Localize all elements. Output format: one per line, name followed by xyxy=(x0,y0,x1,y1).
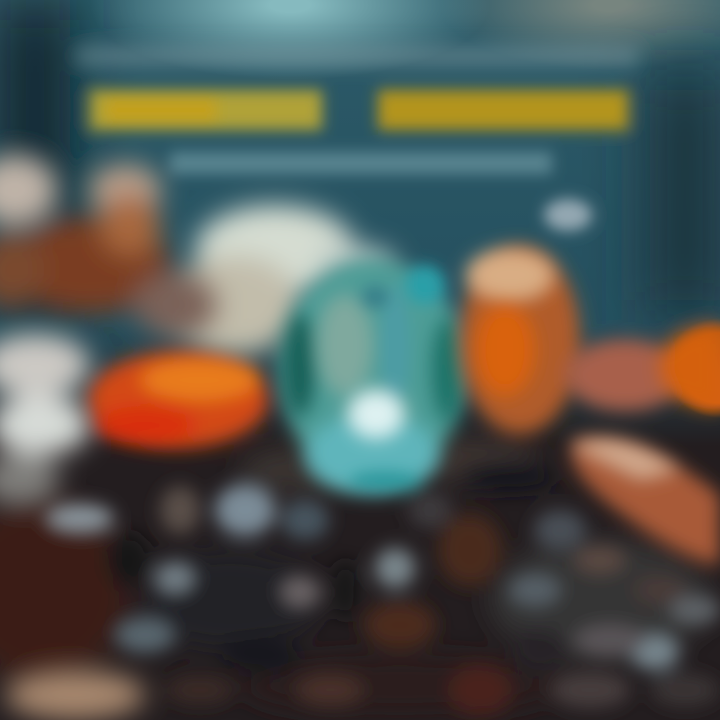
icon: orange capsule right xyxy=(460,246,580,434)
brown amber chunks upper left xyxy=(0,155,217,337)
background: dark side shading xyxy=(0,0,720,320)
blurred small white highlight xyxy=(544,199,592,231)
heading: yellow title bands, illegible xyxy=(90,90,628,130)
heading: upper title band, illegible xyxy=(76,46,638,66)
icon: orange red capsule xyxy=(88,352,268,448)
icon: central teal gem xyxy=(278,258,466,495)
icon: tan capsule lower right xyxy=(570,439,720,565)
subtitle: blurred text band, illegible xyxy=(170,152,552,174)
white powder mound xyxy=(170,205,395,355)
lower dark bed: dark pebbles xyxy=(0,440,720,716)
icon: tan chunk lower left corner xyxy=(5,670,145,720)
icon: orange pieces far right xyxy=(565,325,720,411)
white crystals left xyxy=(0,333,90,505)
